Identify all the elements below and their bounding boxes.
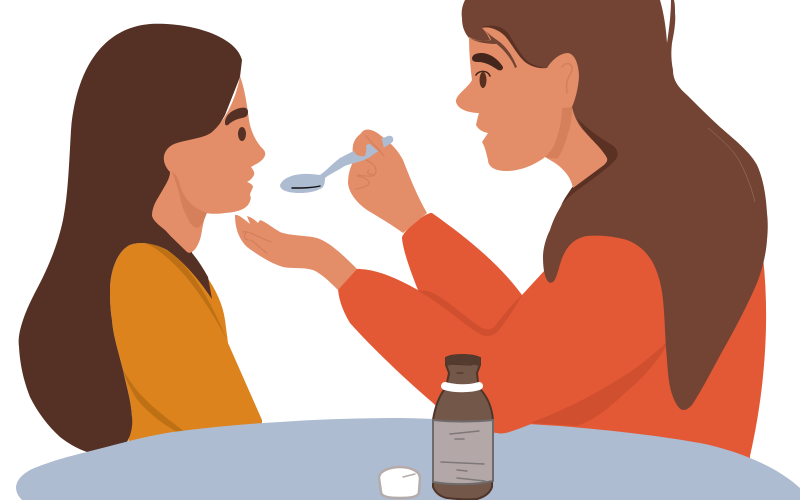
child shirt folds	[123, 242, 227, 433]
child shirt	[110, 243, 262, 450]
mother hair	[462, 0, 768, 410]
mother neck shadow	[545, 107, 572, 158]
sweater hem overlapping the table	[485, 412, 534, 433]
mother eyebrow	[472, 53, 503, 70]
sweater lower fold	[530, 342, 667, 426]
mother forehead hair strand	[482, 26, 547, 68]
bottle cap lid on the table	[379, 467, 420, 498]
bottle cap marks	[452, 364, 472, 373]
finger creases	[356, 136, 384, 189]
medicine bottle	[433, 354, 493, 499]
mother figure	[338, 0, 768, 470]
bottle label text lines	[441, 431, 485, 481]
mother temple hair lock	[469, 28, 517, 68]
mother's hand palm	[348, 130, 427, 233]
mother eye	[476, 71, 490, 88]
bottle label	[433, 420, 493, 484]
bottle white ring	[445, 386, 479, 388]
bottle cap top	[445, 354, 481, 366]
spoon syrup line	[292, 186, 320, 188]
mother hair highlight	[708, 128, 755, 202]
mother's lower hand under child's chin	[235, 215, 357, 290]
child figure	[19, 24, 265, 452]
mother ear detail	[562, 64, 572, 93]
sweater elbow fold	[418, 290, 522, 336]
child eye	[238, 127, 246, 141]
palm creases	[243, 232, 271, 253]
child neck and face	[152, 76, 265, 253]
table	[16, 418, 800, 500]
thumb and fingers over spoon	[353, 130, 384, 189]
mother hair shadow at neck	[560, 118, 618, 207]
spoon	[280, 136, 393, 193]
child neck shadow	[172, 172, 207, 228]
child eyebrow	[225, 108, 248, 125]
mother face and neck	[456, 27, 607, 188]
mother sweater	[338, 213, 766, 470]
bottle body	[433, 355, 493, 499]
child hair	[19, 24, 242, 452]
